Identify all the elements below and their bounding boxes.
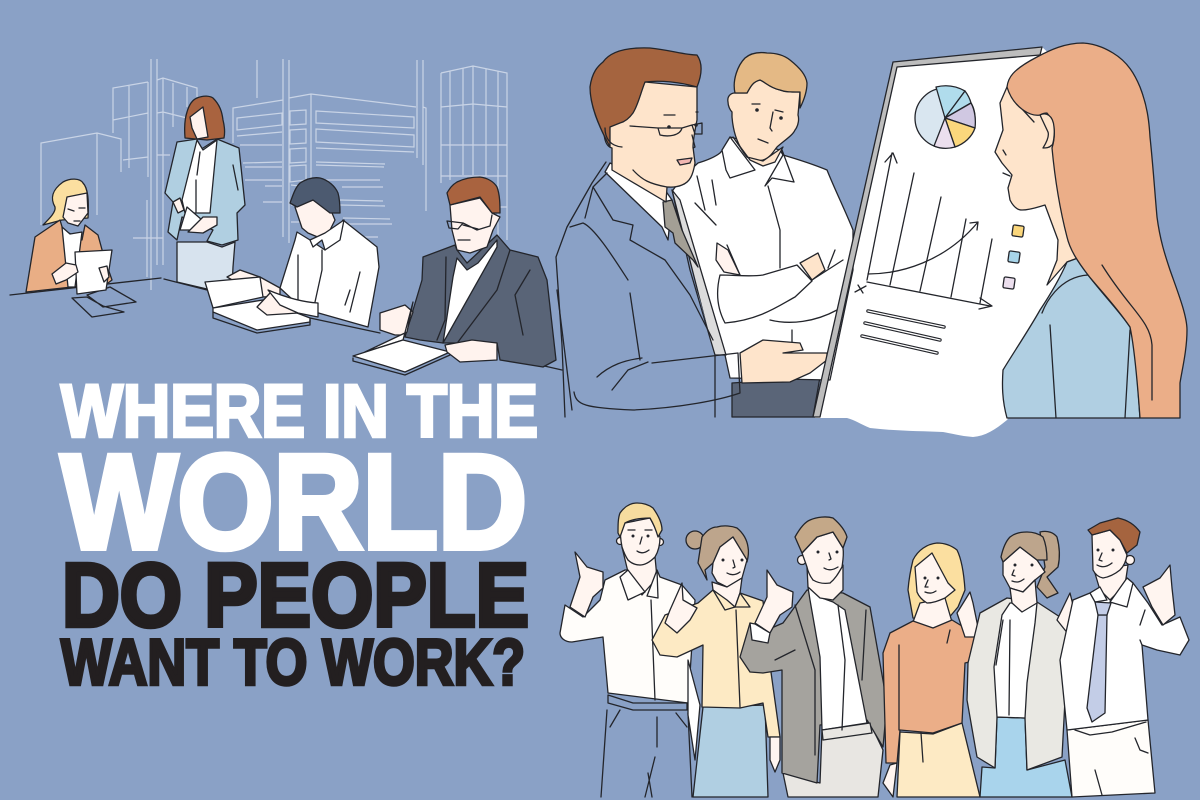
person 4: blonde woman in orange sweater (883, 543, 983, 797)
table (10, 278, 562, 370)
person: man in blue suit with glasses (556, 48, 827, 417)
person: standing woman in blue jacket (165, 96, 245, 289)
team of six people giving thumbs up (560, 503, 1189, 797)
person: woman with long hair at board (995, 43, 1187, 418)
line chart (855, 153, 992, 309)
person 1: blond man, white shirt (560, 503, 695, 797)
person: man in dark jacket with glasses (353, 177, 556, 375)
whiteboard frame (813, 47, 1042, 417)
person 5: woman with ponytail in light blazer (967, 531, 1098, 797)
text lines (862, 311, 944, 353)
buildings line art (41, 59, 507, 290)
person 3: man in grey blazer (740, 517, 887, 797)
pie chart (915, 86, 975, 148)
whiteboard (815, 47, 1100, 437)
person: seated woman in orange jacket (26, 179, 112, 294)
person: man in white shirt reading (205, 178, 379, 333)
title line: WORLD: WORLD (61, 428, 527, 577)
title line: WANT TO WORK?: WANT TO WORK? (61, 626, 525, 698)
title (61, 370, 538, 698)
person 2: woman in yellow blouse (652, 526, 780, 797)
legend swatches (1003, 225, 1024, 289)
title line: DO PEOPLE: DO PEOPLE (62, 546, 529, 646)
person 6: man with tie, white shirt (1060, 518, 1189, 797)
person: blond man with crossed arms (672, 53, 853, 417)
title line: WHERE IN THE: WHERE IN THE (61, 370, 538, 452)
